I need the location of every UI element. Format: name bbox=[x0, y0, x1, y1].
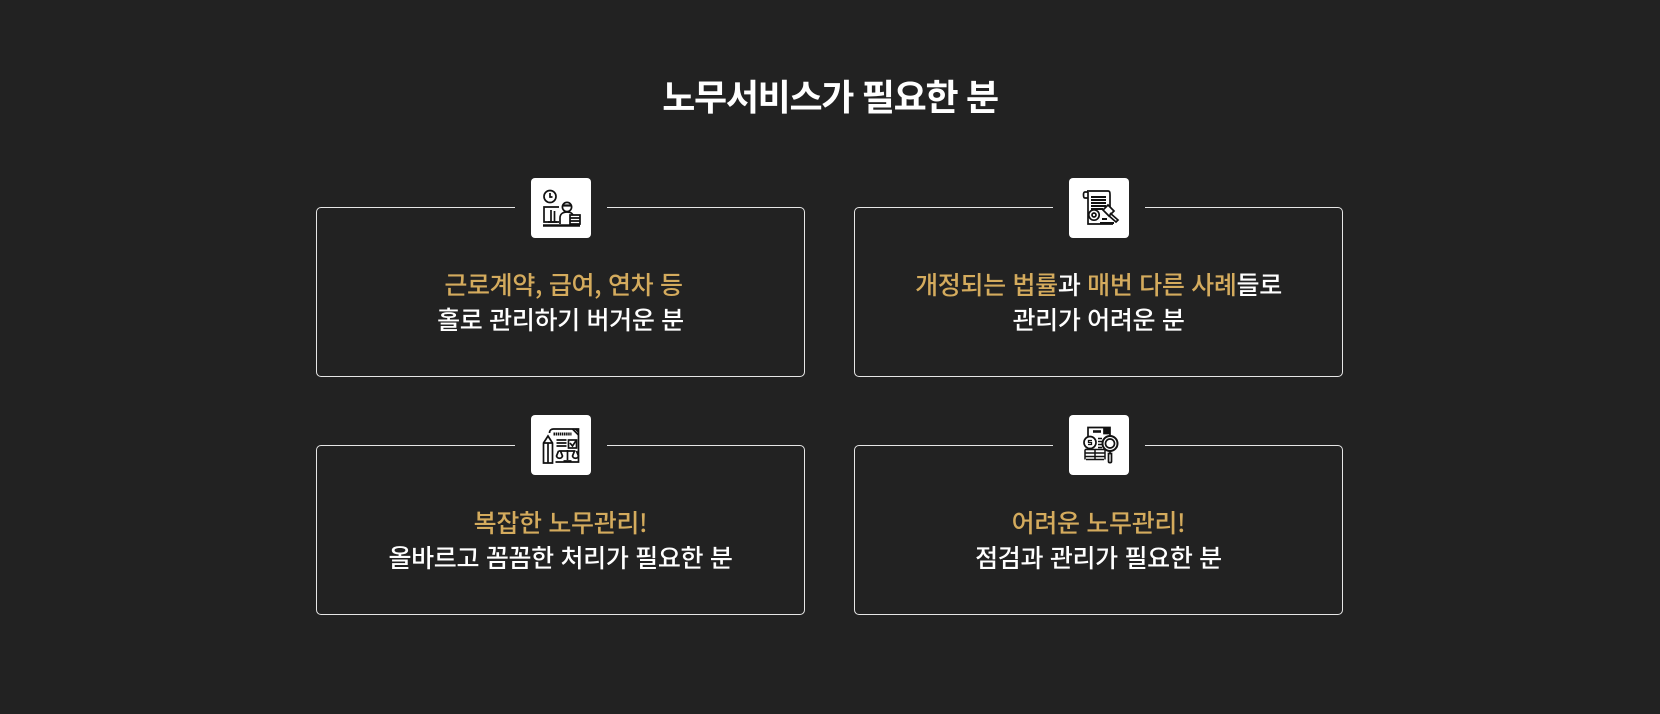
icon: office worker with clock bbox=[531, 178, 591, 238]
panel: difficult labor management bbox=[854, 445, 1343, 615]
title: 노무서비스가 필요한 분 bbox=[662, 77, 998, 118]
panel: employment contracts bbox=[316, 207, 805, 377]
panel text: 점검과 관리가 필요한 분 bbox=[975, 539, 1222, 575]
panel: changing laws bbox=[854, 207, 1343, 377]
panel: complex labor management bbox=[316, 445, 805, 615]
panel text: 어려운 노무관리! bbox=[1012, 504, 1185, 540]
icon: pencil, document and scales bbox=[531, 415, 591, 475]
panel text bbox=[437, 266, 684, 337]
panel text: 홀로 관리하기 버거운 분 bbox=[437, 301, 684, 337]
panel text: 올바르고 꼼꼼한 처리가 필요한 분 bbox=[388, 539, 733, 575]
panel text: 관리가 어려운 분 bbox=[1012, 301, 1185, 337]
panel text: 복잡한 노무관리! bbox=[474, 504, 647, 540]
icon: law document with gavel bbox=[1069, 178, 1129, 238]
panel text: 근로계약, 급여, 연차 등 bbox=[444, 266, 683, 302]
panel text: 개정되는 법률과 매번 다른 사례들로 bbox=[915, 266, 1282, 302]
panel text bbox=[975, 504, 1222, 575]
panel text bbox=[388, 504, 733, 575]
panel text bbox=[915, 266, 1282, 337]
icon: report with magnifier bbox=[1069, 415, 1129, 475]
